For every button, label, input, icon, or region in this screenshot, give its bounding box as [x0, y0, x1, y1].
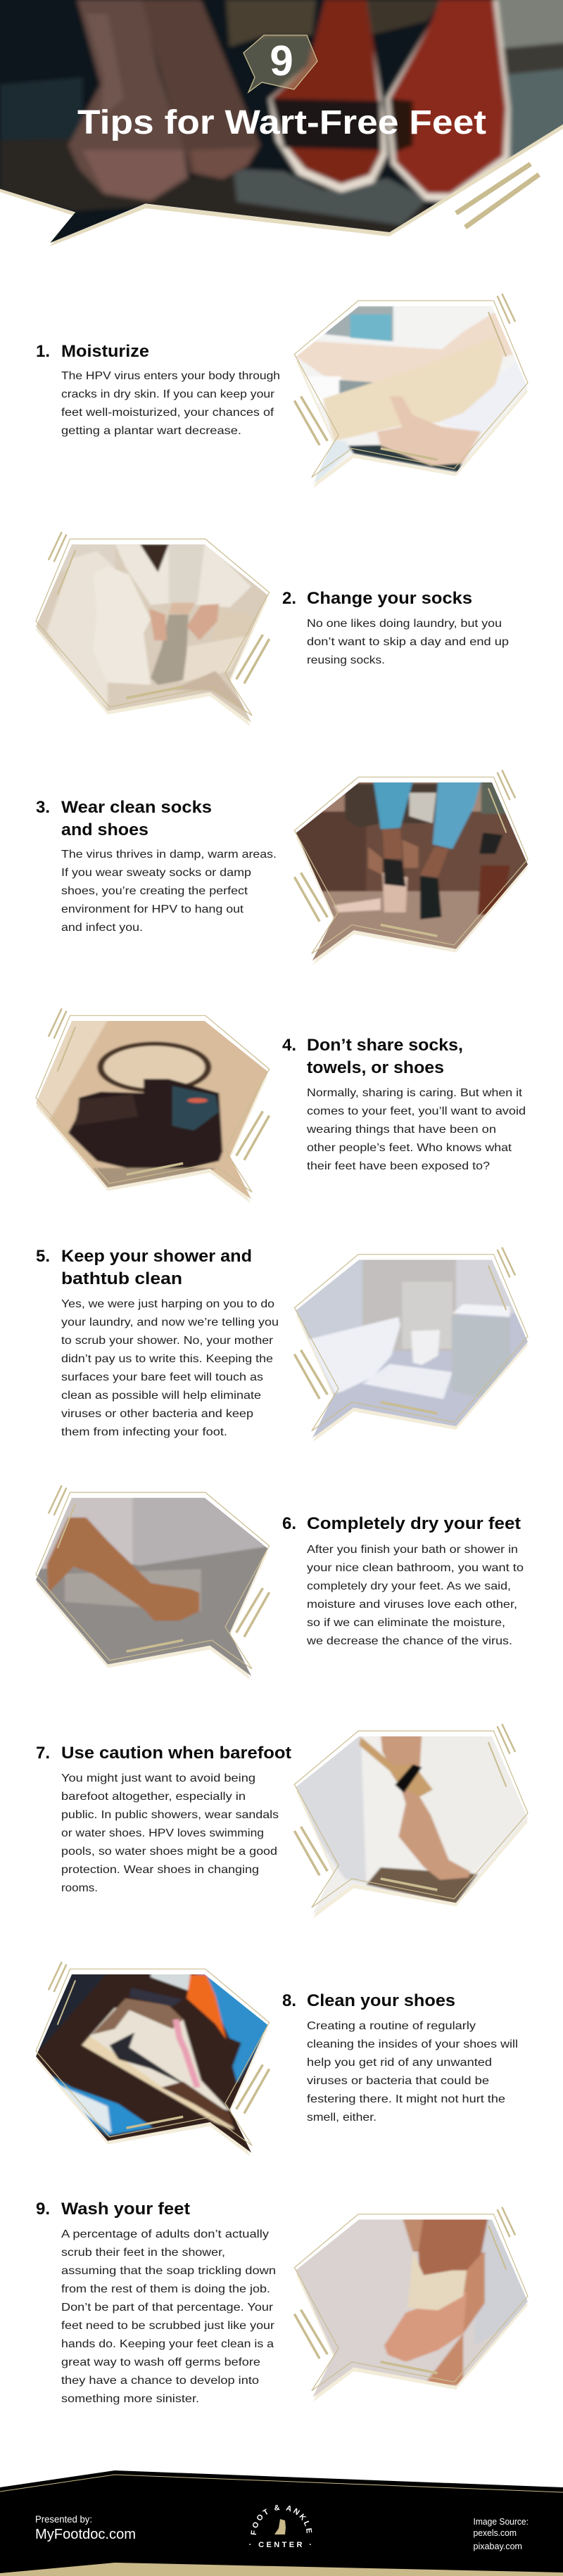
body text — [61, 849, 277, 934]
badge: number nine — [243, 35, 317, 92]
badge: number nine: 9 — [270, 37, 293, 84]
body text: cracks in dry skin. If you can keep your — [61, 388, 275, 400]
heading: Moisturize — [61, 342, 149, 361]
logo: foot and ankle center — [249, 2505, 314, 2549]
heading: Completely dry your feet — [307, 1514, 521, 1533]
heading — [36, 1247, 252, 1288]
presented by — [35, 2514, 136, 2542]
footer black band — [0, 2470, 563, 2576]
photo: foot on a wood board with dry brush — [287, 1724, 538, 1923]
photo: person tying shoes on a bench — [287, 770, 538, 971]
body text: scrub their feet in the shower, — [61, 2247, 225, 2259]
body text — [306, 1544, 524, 1647]
body text: assuming that the soap trickling down — [61, 2265, 276, 2277]
body text: so if we can eliminate the moisture, — [307, 1617, 505, 1629]
body text: cleaning the insides of your shoes will — [307, 2038, 518, 2050]
photo: hands massaging foot — [287, 293, 538, 493]
heading: Clean your shoes — [307, 1991, 455, 2010]
body text: rooms. — [61, 1882, 98, 1894]
footer gold base — [0, 2563, 563, 2576]
body text: pools, so water shoes might be a good — [61, 1846, 277, 1858]
body text — [307, 618, 509, 666]
heading: Don’t share socks, — [307, 1036, 463, 1055]
body text: moisture and viruses love each other, — [307, 1599, 517, 1611]
body text: your laundry, and now we’re telling you — [61, 1316, 279, 1328]
panel: tip 5 keep your shower clean — [36, 1247, 538, 1447]
body text: something more sinister. — [61, 2393, 199, 2405]
heading: 7. — [36, 1744, 50, 1763]
logo: foot and ankle center: · CENTER · — [249, 2541, 314, 2549]
heading — [36, 798, 212, 839]
panel: tip 1 moisturize — [36, 293, 538, 493]
heading: 8. — [282, 1991, 296, 2010]
panel: tip 7 use caution when barefoot — [36, 1724, 538, 1923]
heading: Wash your feet — [61, 2200, 190, 2219]
footer gold line — [0, 2475, 563, 2492]
header photo: bare feet beside red shoes — [0, 0, 563, 251]
body text: completely dry your feet. As we said, — [307, 1580, 511, 1592]
presented by: MyFootdoc.com — [35, 2527, 136, 2542]
panel: tip 2 change your socks — [29, 532, 509, 732]
body text: reusing socks. — [307, 654, 385, 666]
body text: The virus thrives in damp, warm areas. — [61, 849, 277, 861]
body text: A percentage of adults don’t actually — [61, 2228, 269, 2240]
heading: Change your socks — [307, 589, 472, 608]
body text: to scrub your shower. No, your mother — [61, 1335, 274, 1347]
logo: foot and ankle center: FOOT & ANKLE — [251, 2505, 312, 2534]
body text: hands do. Keeping your feet clean is a — [61, 2338, 274, 2350]
heading: Wear clean socks — [61, 798, 212, 817]
photo: woman pulling on socks — [29, 532, 280, 732]
heading: 4. — [282, 1036, 296, 1055]
body text — [61, 2228, 276, 2405]
body text — [307, 2020, 518, 2124]
body text: shoes, you’re creating the perfect — [61, 885, 248, 897]
body text: we decrease the chance of the virus. — [306, 1635, 512, 1647]
body text: If you wear sweaty socks or damp — [61, 867, 251, 879]
body text — [61, 370, 280, 437]
body text: didn’t pay us to write this. Keeping the — [61, 1353, 273, 1365]
body text: The HPV virus enters your body through — [61, 370, 280, 382]
body text: surfaces your bare feet will touch as — [61, 1371, 263, 1383]
image source: pexels.com — [473, 2527, 517, 2538]
body text: feet need to be scrubbed just like your — [61, 2320, 275, 2332]
presented by: Presented by: — [35, 2514, 92, 2525]
body text: help you get rid of any unwanted — [307, 2057, 492, 2069]
body text: comes to your feet, you’ll want to avoid — [307, 1105, 526, 1117]
body text: clean as possible will help eliminate — [61, 1390, 261, 1402]
body text: their feet have been exposed to? — [307, 1160, 490, 1172]
image source — [473, 2516, 529, 2551]
body text — [61, 1772, 279, 1894]
heading: 5. — [36, 1247, 50, 1266]
title: Tips for Wart-Free Feet — [77, 104, 486, 141]
heading: towels, or shoes — [307, 1058, 444, 1077]
body text: festering there. It might not hurt the — [307, 2093, 505, 2105]
photo: scrubbing a foot with a loofah — [287, 2207, 538, 2401]
body text: other people’s feet. Who knows what — [307, 1142, 512, 1154]
body text: them from infecting your foot. — [61, 1426, 227, 1438]
panel: tip 3 wear clean socks and shoes — [36, 770, 538, 971]
body text: great way to wash off germs before — [61, 2356, 260, 2368]
image source: Image Source: — [473, 2516, 529, 2527]
heading: 9. — [36, 2200, 50, 2219]
body text: feet well-moisturized, your chances of — [61, 407, 274, 419]
heading: 6. — [282, 1514, 296, 1533]
body text: from the rest of them is doing the job. — [61, 2283, 270, 2295]
body text: protection. Wear shoes in changing — [61, 1864, 259, 1876]
photo: crossed legs on grey floor — [29, 1485, 280, 1684]
header beige edge — [0, 124, 563, 246]
photo: black leather shoes on a wood floor — [29, 1008, 280, 1208]
heading — [282, 1036, 463, 1077]
image source: pixabay.com — [473, 2541, 522, 2551]
body text: viruses or bacteria that could be — [307, 2075, 489, 2087]
heading: bathtub clean — [61, 1269, 182, 1288]
panel: tip 9 wash your feet — [36, 2200, 538, 2405]
body text: barefoot altogether, especially in — [61, 1791, 246, 1803]
heading: 2. — [282, 589, 296, 608]
body text: Yes, we were just harping on you to do — [61, 1298, 274, 1310]
body text: they have a chance to develop into — [61, 2375, 259, 2387]
panel: header — [0, 0, 563, 251]
body text: Normally, sharing is caring. But when it — [307, 1087, 523, 1099]
photo: bathroom with tub and toilet — [287, 1248, 538, 1447]
body text: your nice clean bathroom, you want to — [307, 1562, 524, 1574]
body text: getting a plantar wart decrease. — [61, 425, 241, 437]
heading: Use caution when barefoot — [61, 1744, 291, 1763]
panel: tip 6 completely dry your feet — [29, 1485, 524, 1684]
body text: and infect you. — [61, 922, 143, 934]
body text — [61, 1298, 279, 1438]
body text: wearing things that have been on — [306, 1124, 496, 1136]
body text: public. In public showers, wear sandals — [61, 1809, 279, 1821]
body text: viruses or other bacteria and keep — [61, 1408, 253, 1420]
heading: Keep your shower and — [61, 1247, 252, 1266]
panel: tip 4 don't share socks — [29, 1008, 526, 1208]
body text: environment for HPV to hang out — [61, 903, 244, 915]
panel: tip 8 clean your shoes — [29, 1962, 518, 2160]
body text: Don’t be part of that percentage. Your — [61, 2302, 274, 2314]
panel: footer — [0, 2470, 563, 2576]
body text: After you finish your bath or shower in — [307, 1544, 518, 1556]
shoes — [264, 37, 391, 196]
photo: high-top sneakers with pink laces — [29, 1962, 280, 2160]
heading: and shoes — [61, 820, 148, 839]
body text: or water shoes. HPV loves swimming — [61, 1827, 264, 1839]
body text: smell, either. — [307, 2112, 377, 2124]
body text: No one likes doing laundry, but you — [307, 618, 502, 630]
header stripes — [456, 164, 539, 227]
body text: Creating a routine of regularly — [307, 2020, 476, 2032]
feet — [68, 0, 189, 202]
body text — [306, 1087, 526, 1172]
body text: You might just want to avoid being — [61, 1772, 255, 1784]
body text: don’t want to skip a day and end up — [307, 636, 509, 648]
heading: 1. — [36, 342, 50, 361]
heading: 3. — [36, 798, 50, 817]
